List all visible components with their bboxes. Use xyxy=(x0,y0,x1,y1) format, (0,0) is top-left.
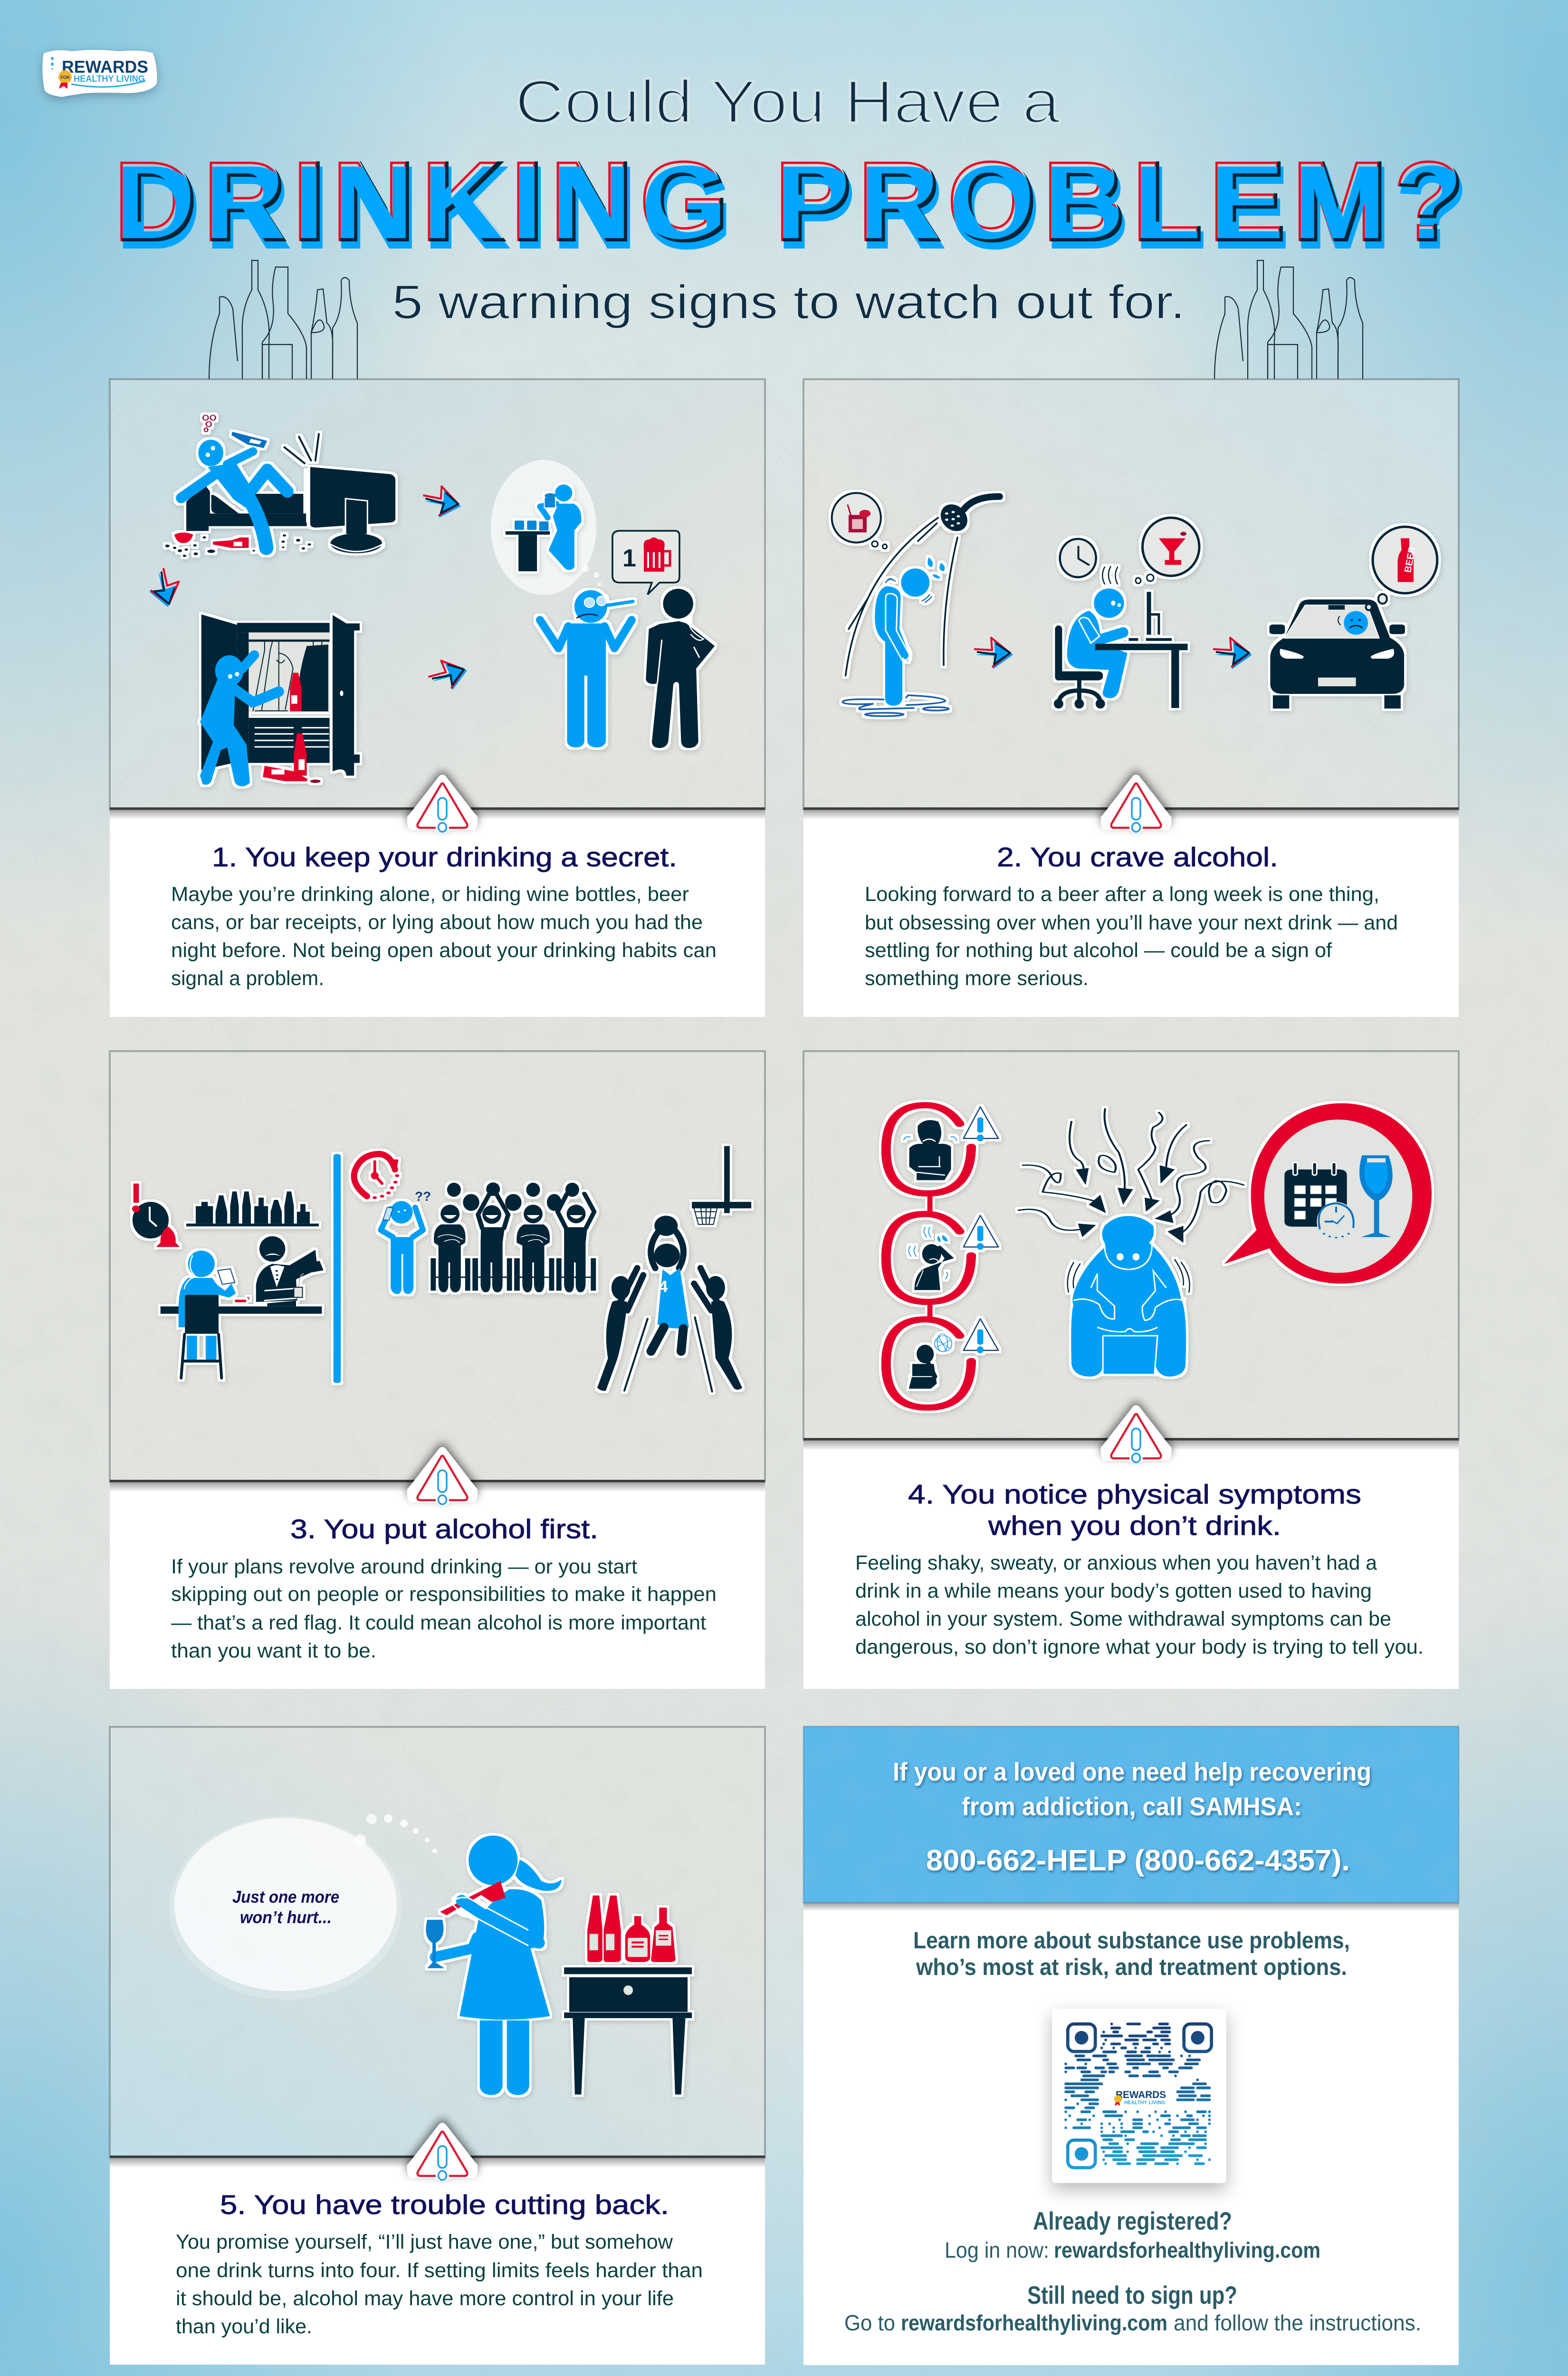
thought bubble xyxy=(169,1814,437,2000)
body text: Looking forward to a beer after a long week is one thing, xyxy=(865,883,1379,906)
body text xyxy=(176,2231,703,2338)
arrow xyxy=(974,638,1013,669)
caption box 2 xyxy=(803,809,1459,1017)
body text: settling for nothing but alcohol — could be a sign of xyxy=(865,939,1332,962)
logo: Rewards for Healthy Living: FOR xyxy=(61,75,70,80)
alert icon xyxy=(407,775,478,833)
SAMHSA call out xyxy=(893,1758,1371,1877)
logo: Rewards for Healthy Living: REWARDS xyxy=(62,57,148,77)
already registered: Already registered? xyxy=(1033,2207,1232,2235)
heading: 4. You notice physical symptoms xyxy=(908,1479,1361,1510)
thought text: won’t hurt... xyxy=(240,1907,332,1927)
QR centre logo: REWARDS xyxy=(1116,2089,1166,2100)
body text: Maybe you’re drinking alone, or hiding wine bottles, beer xyxy=(171,883,689,906)
bottle label: BEER: BEER xyxy=(1403,546,1418,574)
white resources box xyxy=(803,1903,1459,2365)
heading: 5. You have trouble cutting back. xyxy=(220,2190,669,2220)
already registered xyxy=(945,2207,1320,2262)
illustration: bar instead of responsibilities xyxy=(132,1146,751,1391)
still need to sign up: Go to xyxy=(844,2310,895,2335)
heading: 1. You keep your drinking a secret. xyxy=(212,842,677,872)
learn more text xyxy=(913,1928,1350,1980)
illustration: pouring another drink xyxy=(426,1836,692,2095)
alert icon xyxy=(1101,1405,1171,1464)
body text xyxy=(171,883,717,990)
still need to sign up: Still need to sign up? xyxy=(1027,2281,1237,2309)
body text: alcohol in your system. Some withdrawal symptoms can be xyxy=(855,1608,1391,1630)
body text: — that’s a red flag. It could mean alcohol is more important xyxy=(171,1611,706,1634)
already registered: Log in now: xyxy=(945,2238,1049,2262)
panel: sign 4 xyxy=(803,1051,1459,1689)
alert icon xyxy=(407,1447,478,1505)
arrow xyxy=(1213,638,1252,669)
QR code xyxy=(1066,2024,1212,2168)
thought text xyxy=(232,1887,339,1927)
logo: Rewards for Healthy Living xyxy=(42,50,157,97)
body text: than you want it to be. xyxy=(171,1639,376,1662)
body text: dangerous, so don’t ignore what your body is trying to tell you. xyxy=(855,1636,1424,1658)
illustration: hiding drinking and lying xyxy=(165,415,715,786)
alert icon xyxy=(407,2123,478,2181)
heading: when you don’t drink. xyxy=(988,1511,1281,1541)
panel: sign 3 xyxy=(110,1051,765,1689)
title line: Could You Have a: Could You Have a xyxy=(515,68,1061,136)
body text: If your plans revolve around drinking — or you start xyxy=(171,1555,637,1578)
body text: signal a problem. xyxy=(171,967,324,990)
thought bubble: imagined drinking xyxy=(491,460,602,595)
body text: You promise yourself, “I’ll just have one,” but somehow xyxy=(176,2231,673,2253)
illustration: craving in shower, at work, in car xyxy=(832,493,1437,716)
heading: 2. You crave alcohol. xyxy=(997,842,1278,872)
logo: Rewards for Healthy Living: HEALTHY LIVING xyxy=(74,74,145,84)
QR code card xyxy=(1052,2009,1226,2183)
QR centre logo xyxy=(1114,2089,1166,2106)
SAMHSA call out: from addiction, call SAMHSA: xyxy=(962,1792,1302,1821)
arrow xyxy=(421,484,463,520)
SAMHSA call out: 800-662-HELP (800-662-4357). xyxy=(926,1844,1350,1877)
body text: it should be, alcohol may have more control in your life xyxy=(176,2287,674,2310)
body text: than you’d like. xyxy=(176,2315,312,2338)
learn more text: Learn more about substance use problems, xyxy=(913,1928,1350,1954)
jersey number: 4 xyxy=(659,1278,668,1296)
panel: sign 2 xyxy=(803,379,1459,1017)
thought text: Just one more xyxy=(232,1887,339,1907)
question marks: ?? xyxy=(415,1189,431,1204)
body text: something more serious. xyxy=(865,967,1089,990)
learn more text: who’s most at risk, and treatment options. xyxy=(916,1954,1347,1980)
caption box 3 xyxy=(110,1482,765,1689)
panel: sign 5 xyxy=(110,1727,765,2365)
still need to sign up: and follow the instructions. xyxy=(1174,2310,1421,2335)
SAMHSA call out: If you or a loved one need help recovering xyxy=(893,1758,1371,1786)
heading: 3. You put alcohol first. xyxy=(290,1514,598,1544)
body text: Feeling shaky, sweaty, or anxious when you haven’t had a xyxy=(855,1552,1377,1574)
main title: DRINKING PROBLEM?: DRINKING PROBLEM? xyxy=(118,145,1466,270)
speech box: 1 beer: 1 xyxy=(622,545,636,572)
caption box 5 xyxy=(110,2157,765,2365)
heading xyxy=(908,1479,1361,1541)
body text: night before. Not being open about your drinking habits can xyxy=(171,939,717,962)
arrow xyxy=(425,654,472,696)
body text: one drink turns into four. If setting limits feels harder than xyxy=(176,2259,703,2282)
alert icon xyxy=(1101,775,1171,833)
caption box 4 xyxy=(803,1440,1459,1689)
speech box: 1 beer xyxy=(612,531,679,594)
body text: drink in a while means your body’s gotten used to having xyxy=(855,1580,1372,1602)
decorative bottle outlines: right xyxy=(1214,260,1363,379)
panel: sign 1 xyxy=(110,379,765,1017)
decorative bottle outlines: left xyxy=(209,260,357,379)
illustration: withdrawal symptoms xyxy=(886,1103,1432,1408)
panel: help and resources xyxy=(803,1726,1459,2365)
body text xyxy=(865,883,1398,990)
body text xyxy=(171,1555,717,1662)
body text: skipping out on people or responsibilities to make it happen xyxy=(171,1583,717,1606)
QR centre logo: HEALTHY LIVING xyxy=(1124,2100,1165,2106)
main title: DRINKING PROBLEM?: DRINKING PROBLEM? xyxy=(114,139,1463,264)
already registered: rewardsforhealthyliving.com xyxy=(1054,2238,1320,2262)
body text xyxy=(855,1552,1424,1658)
still need to sign up: rewardsforhealthyliving.com xyxy=(901,2310,1167,2335)
main title: DRINKING PROBLEM?: DRINKING PROBLEM? xyxy=(116,139,1464,264)
subtitle: 5 warning signs to watch out for. xyxy=(392,276,1186,329)
caption box 1 xyxy=(110,809,765,1017)
body text: cans, or bar receipts, or lying about how much you had the xyxy=(171,911,703,934)
body text: but obsessing over when you’ll have your next drink — and xyxy=(865,911,1398,934)
arrow xyxy=(144,565,184,611)
still need to sign up xyxy=(844,2281,1421,2335)
